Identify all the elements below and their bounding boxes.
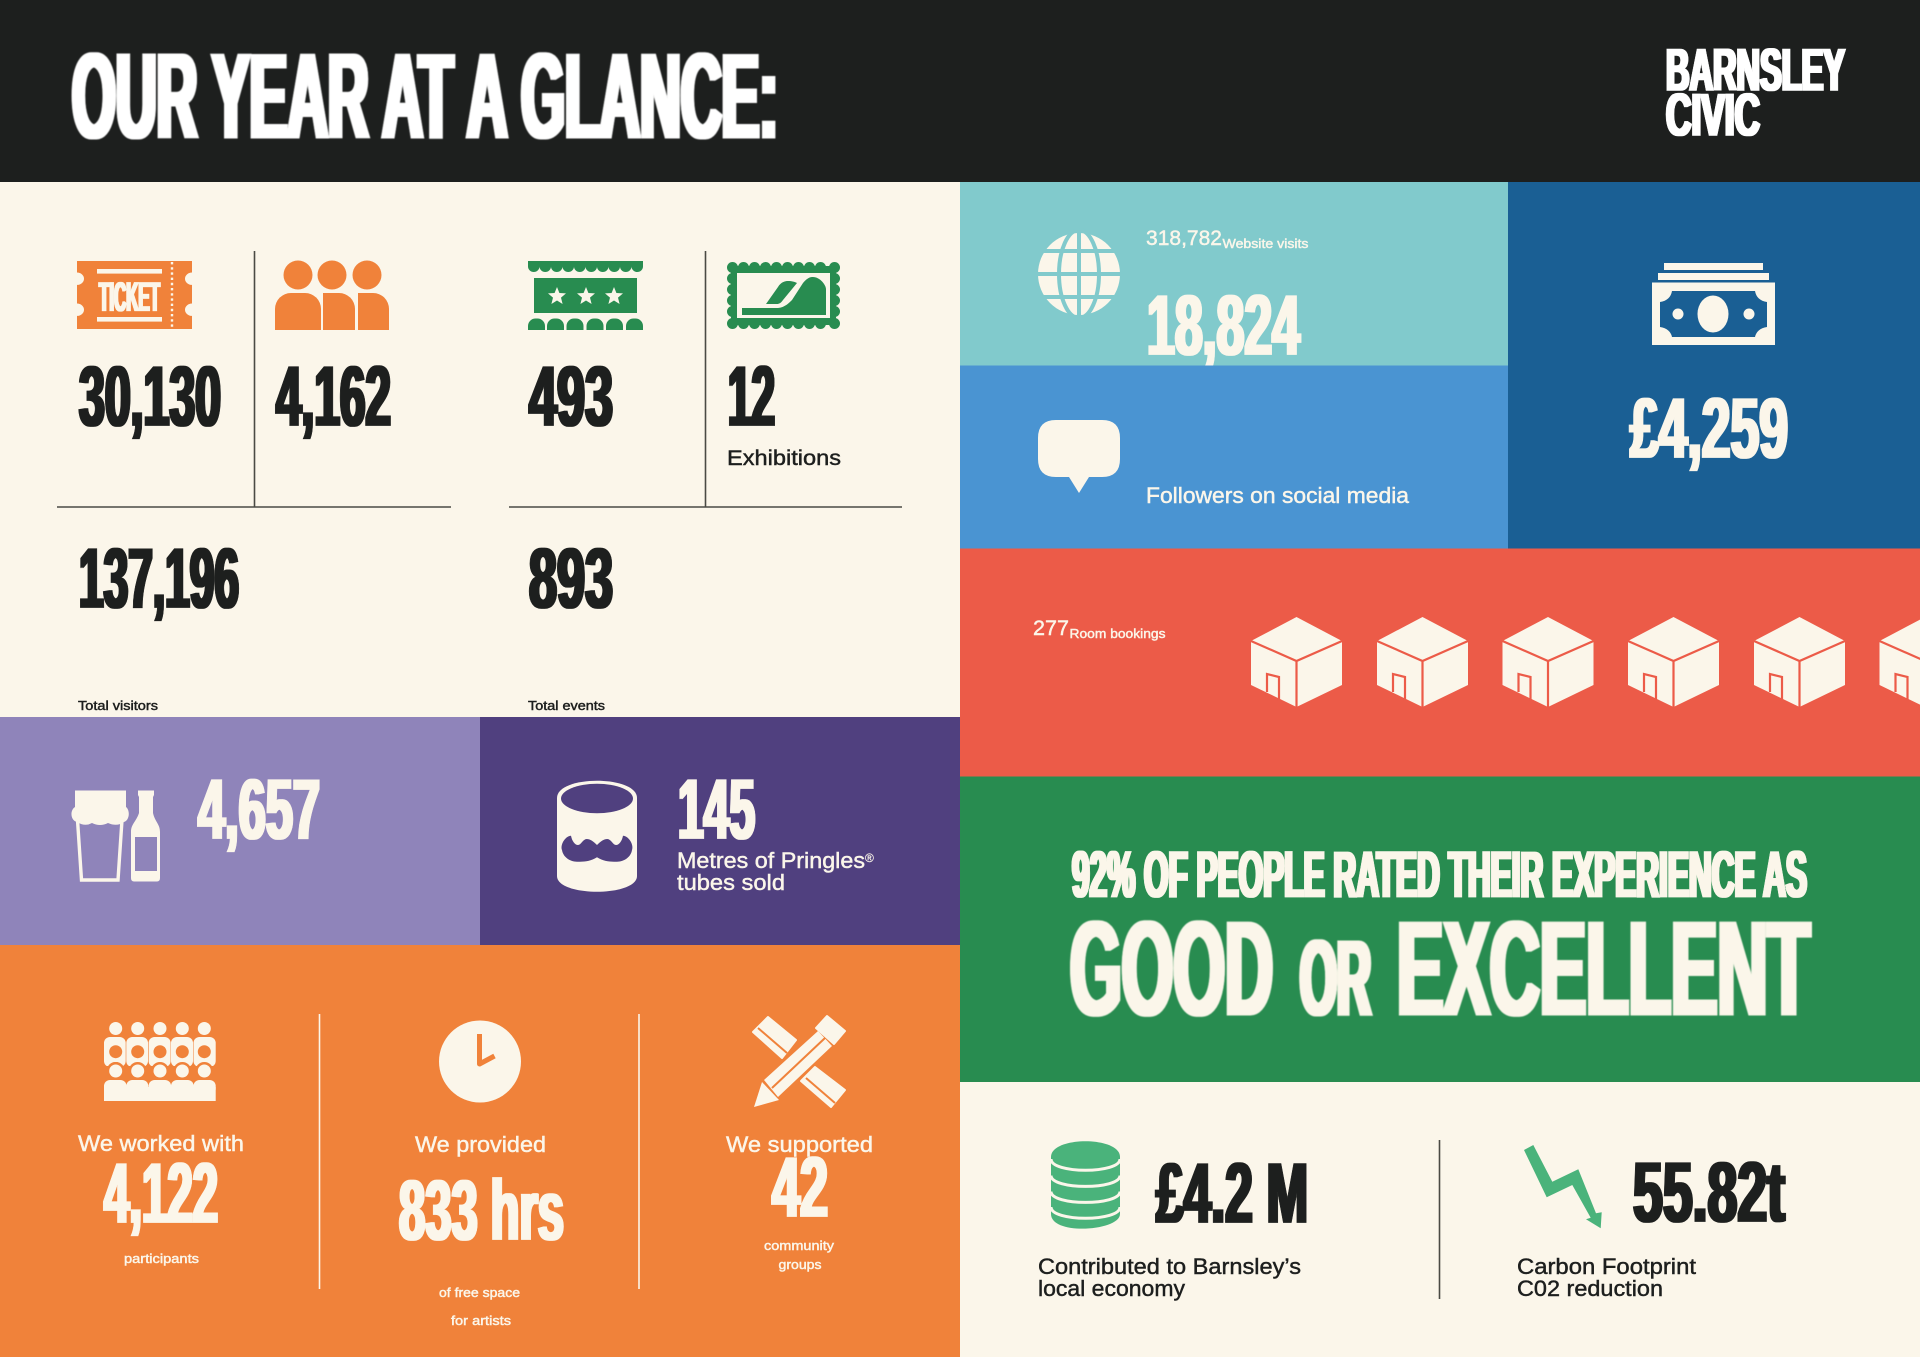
label: total events: Total events xyxy=(528,698,606,713)
label: of free space for artists xyxy=(439,1285,520,1328)
label: 277 room bookings: Room bookings xyxy=(1070,626,1166,641)
label: metres of Pringles tubes sold: tubes sold xyxy=(677,870,785,895)
stat: 137,196: 137,196 xyxy=(79,532,239,626)
stat: 145: 145 xyxy=(678,762,755,858)
icon: clock xyxy=(439,1020,521,1102)
panel: economy and carbon xyxy=(960,1082,1920,1357)
icon: speech bubble xyxy=(1038,420,1120,493)
stat: £4,259: £4,259 xyxy=(1630,382,1788,476)
icon: banknotes xyxy=(1652,263,1775,345)
icon: ticket xyxy=(77,261,192,329)
label: contributed to local economy: Contributed to Barnsley’s xyxy=(1038,1254,1301,1279)
label: 318,782 website visits: Website visits xyxy=(1222,236,1309,251)
stat: 893: 893 xyxy=(529,532,613,626)
icon: exhibition picture stamp xyxy=(727,262,840,329)
label: community groups: community xyxy=(764,1238,835,1253)
label: 277 room bookings: 277 xyxy=(1033,617,1069,640)
stat: £4.2 M: £4.2 M xyxy=(1156,1146,1308,1242)
heading: good or excellent: GOOD xyxy=(1070,893,1273,1044)
panel: visitors and events: 12 xyxy=(728,350,775,444)
stat: 493: 493 xyxy=(529,350,613,444)
label: carbon footprint reduction: C02 reduction xyxy=(1517,1276,1663,1301)
logo: Barnsley Civic: CIVIC xyxy=(1666,82,1760,148)
icon: coin stack xyxy=(1051,1141,1120,1229)
label: contributed to local economy: local economy xyxy=(1038,1276,1185,1301)
panel: header: OUR YEAR AT A GLANCE: xyxy=(72,28,778,164)
stat: 4,657: 4,657 xyxy=(198,762,320,858)
panel: header xyxy=(0,0,1920,182)
text: we worked with: We worked with xyxy=(78,1131,244,1156)
stat: 55.82t: 55.82t xyxy=(1633,1146,1785,1240)
icon: people xyxy=(275,260,389,330)
icon: pringles tube xyxy=(557,781,637,892)
stat: 18,824: 18,824 xyxy=(1147,278,1300,374)
heading: good or excellent xyxy=(1070,893,1810,1044)
icon: downward zigzag arrow xyxy=(1524,1145,1602,1228)
label: 318,782 website visits xyxy=(1146,227,1309,251)
stat: 4,122: 4,122 xyxy=(104,1146,218,1242)
icon: crossed pencil and ruler xyxy=(753,1016,845,1107)
label: of free space for artists: for artists xyxy=(451,1313,512,1328)
panel: money raised xyxy=(1508,182,1920,548)
stat: 833 hrs: 833 hrs xyxy=(399,1164,564,1258)
panel: website visits xyxy=(960,182,1508,374)
icon: globe xyxy=(1035,230,1123,318)
label: metres of Pringles tubes sold: ® xyxy=(865,851,874,865)
label: metres of Pringles tubes sold xyxy=(677,848,874,895)
label: 318,782 website visits: 318,782 xyxy=(1146,227,1222,250)
label: contributed to local economy xyxy=(1038,1254,1301,1301)
icon: beer and bottle xyxy=(71,790,160,882)
label: of free space for artists: of free space xyxy=(439,1285,520,1300)
panel: visitors and events xyxy=(0,182,960,717)
panel: room bookings xyxy=(960,548,1920,776)
panel: satisfaction xyxy=(960,776,1920,1082)
label: 277 room bookings xyxy=(1033,617,1166,641)
label: community groups: groups xyxy=(778,1257,822,1272)
label: metres of Pringles tubes sold: Metres of Pringles xyxy=(677,848,865,873)
text: we supported: We supported xyxy=(726,1132,873,1157)
panel: social followers xyxy=(960,366,1508,548)
icon: audience xyxy=(100,1022,220,1101)
label: participants: participants xyxy=(124,1251,200,1266)
text: we provided: We provided xyxy=(415,1132,546,1157)
label: carbon footprint reduction: Carbon Footprint xyxy=(1517,1254,1696,1279)
icon: curtain and stars xyxy=(528,261,643,330)
icon: ticket: TICKET xyxy=(99,273,160,320)
label: followers on social media: Followers on social media xyxy=(1146,483,1410,508)
label: exhibitions: Exhibitions xyxy=(727,447,841,470)
label: total visitors: Total visitors xyxy=(78,698,159,713)
stat: 30,130: 30,130 xyxy=(79,350,221,444)
stat: 42: 42 xyxy=(772,1140,828,1236)
panel: community impact xyxy=(0,945,960,1357)
label: carbon footprint reduction xyxy=(1517,1254,1696,1301)
stat: 4,162: 4,162 xyxy=(276,350,391,444)
icons: rooms xyxy=(1251,617,1920,707)
heading: good or excellent: OR xyxy=(1300,917,1371,1038)
label: community groups xyxy=(764,1238,835,1272)
panel: pringles xyxy=(480,717,960,945)
logo: Barnsley Civic xyxy=(1666,36,1845,148)
panel: drinks sold xyxy=(0,717,480,945)
